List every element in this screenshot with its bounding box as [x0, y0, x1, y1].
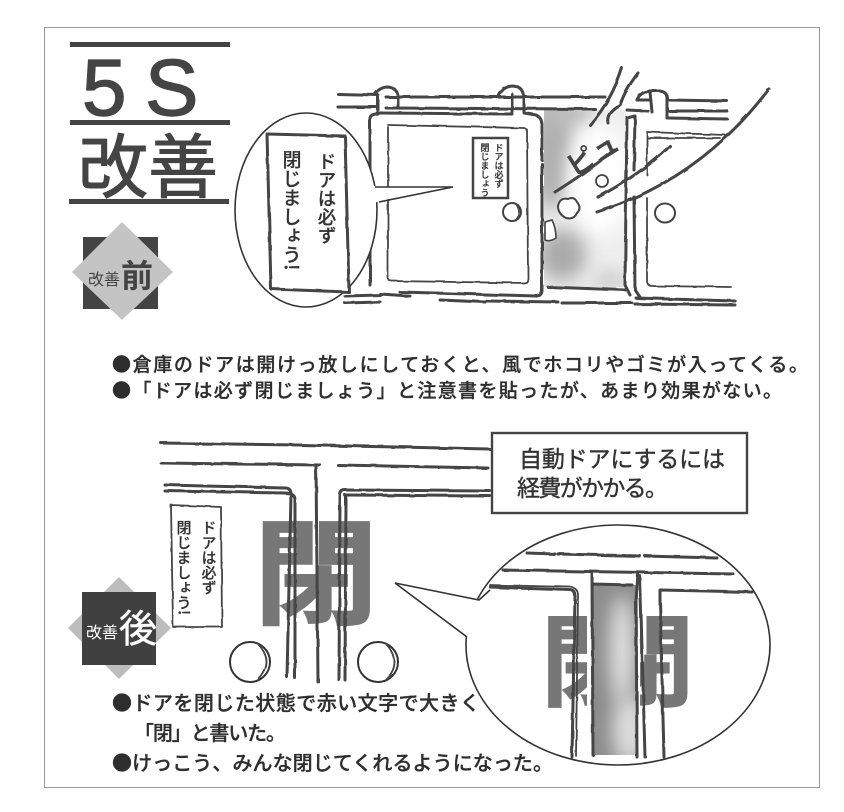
rails and door edges — [490, 553, 752, 757]
wind lines — [555, 146, 670, 197]
speech bubble: notice close-up — [235, 113, 453, 307]
title: 5S 改善 — [69, 42, 230, 207]
callout: automatic door cost — [492, 433, 747, 513]
text block: problems before improvement: ●「ドアは必ず閉じましょう」と注意書を貼ったが、あまり効果がない。 — [112, 376, 782, 403]
big red character 閉: 閉 — [254, 513, 378, 640]
title: 5S 改善: 5 — [82, 43, 126, 132]
notice on closed door: 閉じましょう! — [174, 520, 194, 615]
split character right half: 閉 — [594, 608, 694, 720]
title: 5S 改善: 改善 — [78, 129, 218, 207]
left door hooks — [375, 87, 398, 110]
wind sound effect: ピュ — [561, 127, 625, 183]
door floor rails — [345, 294, 735, 305]
notice on closed door: ドアは必ず — [198, 520, 220, 595]
rails — [161, 443, 490, 496]
badge: 改善後 — [68, 577, 171, 679]
text block: problems before improvement — [112, 350, 808, 403]
enlarged notice — [267, 134, 349, 292]
illustration: closed door with big character — [161, 443, 490, 682]
badge: 改善前: 前 — [121, 258, 153, 294]
title: 5S 改善: S — [145, 43, 198, 132]
callout: automatic door cost: 経費がかかる。 — [517, 475, 668, 501]
text block: result after improvement: 「閉」と書いた。 — [134, 717, 286, 746]
text block: problems before improvement: ●倉庫のドアは開けっ放しにしておくと、風でホコリやゴミが入ってくる。 — [112, 350, 808, 377]
door knobs — [503, 203, 521, 221]
badge: 改善前 — [72, 222, 173, 320]
speech bubble: notice close-up: 閉じましょう! — [278, 150, 306, 271]
rails — [338, 94, 605, 114]
dust and litter — [558, 198, 580, 218]
small notice on door: 閉じましょう — [478, 143, 492, 197]
notice on closed door — [171, 505, 222, 627]
split character left half: 閉 — [541, 608, 641, 720]
door knobs — [230, 642, 270, 682]
small notice on door — [473, 138, 508, 198]
text block: result after improvement: ●ドアを閉じた状態で赤い文字で大きく — [112, 687, 480, 716]
illustration: warehouse door left open — [338, 68, 769, 305]
text block: result after improvement — [112, 687, 553, 776]
magnified detail bubble — [395, 525, 770, 765]
callout: automatic door cost: 自動ドアにするには — [519, 446, 725, 472]
badge: 改善後: 改善 — [86, 624, 118, 642]
text block: result after improvement: ●けっこう、みんな閉じてくれるようになった。 — [112, 747, 553, 776]
open gap between doors — [593, 585, 638, 755]
shaded open gap — [544, 110, 626, 287]
badge: 改善後: 後 — [119, 609, 157, 651]
right door — [637, 91, 667, 118]
speech bubble: notice close-up: ドアは必ず — [314, 152, 340, 244]
small notice on door: ドアは必ず — [492, 143, 506, 188]
badge: 改善前: 改善 — [88, 271, 120, 289]
door edges — [285, 465, 346, 682]
door outline — [370, 113, 542, 296]
